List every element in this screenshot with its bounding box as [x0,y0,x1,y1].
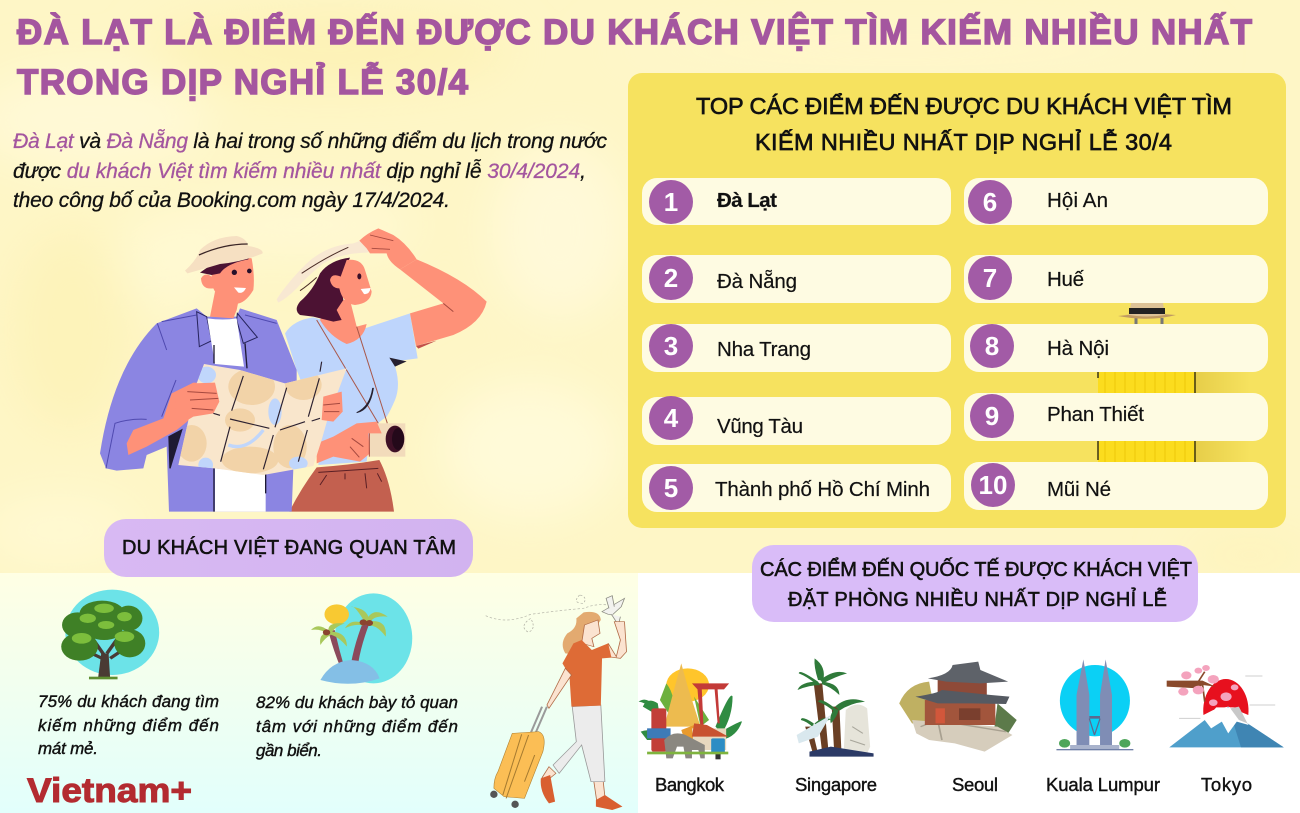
icon: palm island on cyan circle [311,593,412,684]
rank 1: 1 [664,187,678,217]
rank 10: 10 [979,470,1007,500]
illustration: woman with suitcase [486,595,627,810]
rank 4 [642,396,951,445]
rank 4: 4 [664,403,679,433]
woman hand on camera [317,422,382,463]
rank 10 [964,462,1268,510]
camera [369,423,405,457]
rank 10: Mũi Né [1047,478,1111,501]
plane [602,598,624,615]
pill heading: international destinations [752,545,1198,622]
text block: 82%: gần biển. [256,741,322,760]
ankles [542,767,605,801]
text block: 75% [38,692,219,758]
rank 8: Hà Nội [1047,337,1109,360]
illustration: couple with map [100,228,487,512]
panel: bottom-left gradient [0,573,638,813]
rank 3 [642,324,951,372]
woman face [330,260,372,305]
label: Kuala Lumpur: Kuala Lumpur [1046,774,1160,795]
label: Bangkok: Bangkok [655,774,725,795]
rank 6 [964,178,1268,225]
pill heading: du khách Việt [104,519,473,577]
shirt [562,640,611,707]
back arm [547,668,571,708]
rank 9: 9 [985,401,999,431]
text block: 82% [256,693,458,760]
title [17,12,1252,102]
rank 7 [964,255,1268,303]
woman raised arm [400,259,487,346]
map [177,362,347,475]
heading: TOP CÁC ĐIỂM ĐẾN ĐƯỢC DU KHÁCH VIỆT TÌM [696,92,1232,119]
rank 2: 2 [664,263,678,293]
rank 7: 7 [983,263,997,293]
label: Seoul: Seoul [952,774,998,795]
icon: Tokyo [1167,665,1284,747]
suitcase handle [531,707,547,735]
rank 6: Hội An [1047,189,1108,212]
icon: Bangkok [639,663,742,759]
text block: intro paragraph: Đà Lạt và Đà Nẵng là hai trong số những điểm du lịch trong nước [13,130,608,153]
rank 1 [642,178,951,225]
rank 9 [964,393,1268,441]
rank 5: Thành phố Hồ Chí Minh [715,478,930,501]
text block: intro paragraph: được du khách Việt tìm kiếm nhiều nhất dịp nghỉ lễ 30/4/2024, [13,160,586,183]
woman hat [277,238,387,303]
icon: Singapore [797,658,874,757]
man hat [185,236,263,273]
text block: 82%: 82% du khách bày tỏ quan [256,693,458,712]
rank 2: Đà Nẵng [717,270,797,293]
pill heading: international destinations: CÁC ĐIỂM ĐẾN QUỐC TẾ ĐƯỢC KHÁCH VIỆT [760,557,1192,581]
rank 4: Vũng Tàu [717,415,803,438]
suitcase backdrop with hat [1098,303,1250,510]
man shirt [207,318,244,367]
man hand on map [175,383,219,427]
text block: 75%: mát mẻ. [38,739,98,758]
pill heading: du khách Việt: DU KHÁCH VIỆT ĐANG QUAN TÂM [122,536,456,559]
text block: 75%: kiếm những điểm đến [38,716,219,735]
face [582,620,600,647]
text block: 75%: 75% du khách đang tìm [38,692,219,711]
rank 3: Nha Trang [717,338,811,361]
woman skirt [289,460,394,512]
rank 5: 5 [664,473,678,503]
suitcase [494,732,544,798]
icon: Kuala Lumpur [1056,659,1133,750]
woman hair [297,258,350,322]
man jacket [100,308,297,512]
title: ĐÀ LẠT LÀ ĐIỂM ĐẾN ĐƯỢC DU KHÁCH VIỆT TÌM KIẾM NHIỀU NHẤT [17,12,1252,52]
icon: tree on cyan circle [61,590,159,679]
rank 3: 3 [664,331,678,361]
text block: intro paragraph: theo công bố của Booking.com ngày 17/4/2024. [13,189,450,212]
woman neck and chest [320,300,367,344]
pill heading: international destinations: ĐẶT PHÒNG NHIỀU NHẤT DỊP NGHỈ LỄ [788,588,1167,611]
title: TRONG DỊP NGHỈ LỄ 30/4 [17,62,469,102]
woman top [285,313,418,465]
panel: bottom-right white [638,573,1300,813]
label: Tokyo: Tokyo [1201,774,1252,795]
hair [563,612,601,655]
woman hand on map [322,392,343,422]
man neck [210,292,240,318]
flight path [486,595,608,632]
rank 1: Đà Lạt [717,189,777,212]
woman hand on hat [359,228,417,269]
rank 8 [964,324,1268,372]
panel: top destinations [628,73,1286,528]
heading [696,92,1232,155]
man arm [127,383,219,455]
rank 7: Huế [1047,268,1085,291]
text block: 82%: tâm với những điểm đến [256,717,458,736]
man face [201,257,254,304]
heading: KIẾM NHIỀU NHẤT DỊP NGHỈ LỄ 30/4 [755,127,1172,155]
label: Singapore: Singapore [795,774,877,795]
pants [553,705,605,782]
camera straps [317,320,387,423]
rank 5 [642,464,951,512]
arm [608,622,627,658]
rank 6: 6 [983,187,997,217]
icon: Seoul [899,662,1017,752]
rank 8: 8 [985,331,999,361]
rank 2 [642,255,951,303]
rank 9: Phan Thiết [1047,403,1144,426]
shoes [541,775,555,803]
logo: Vietnam+: Vietnam+ [27,772,192,810]
text block: intro paragraph [13,130,608,212]
